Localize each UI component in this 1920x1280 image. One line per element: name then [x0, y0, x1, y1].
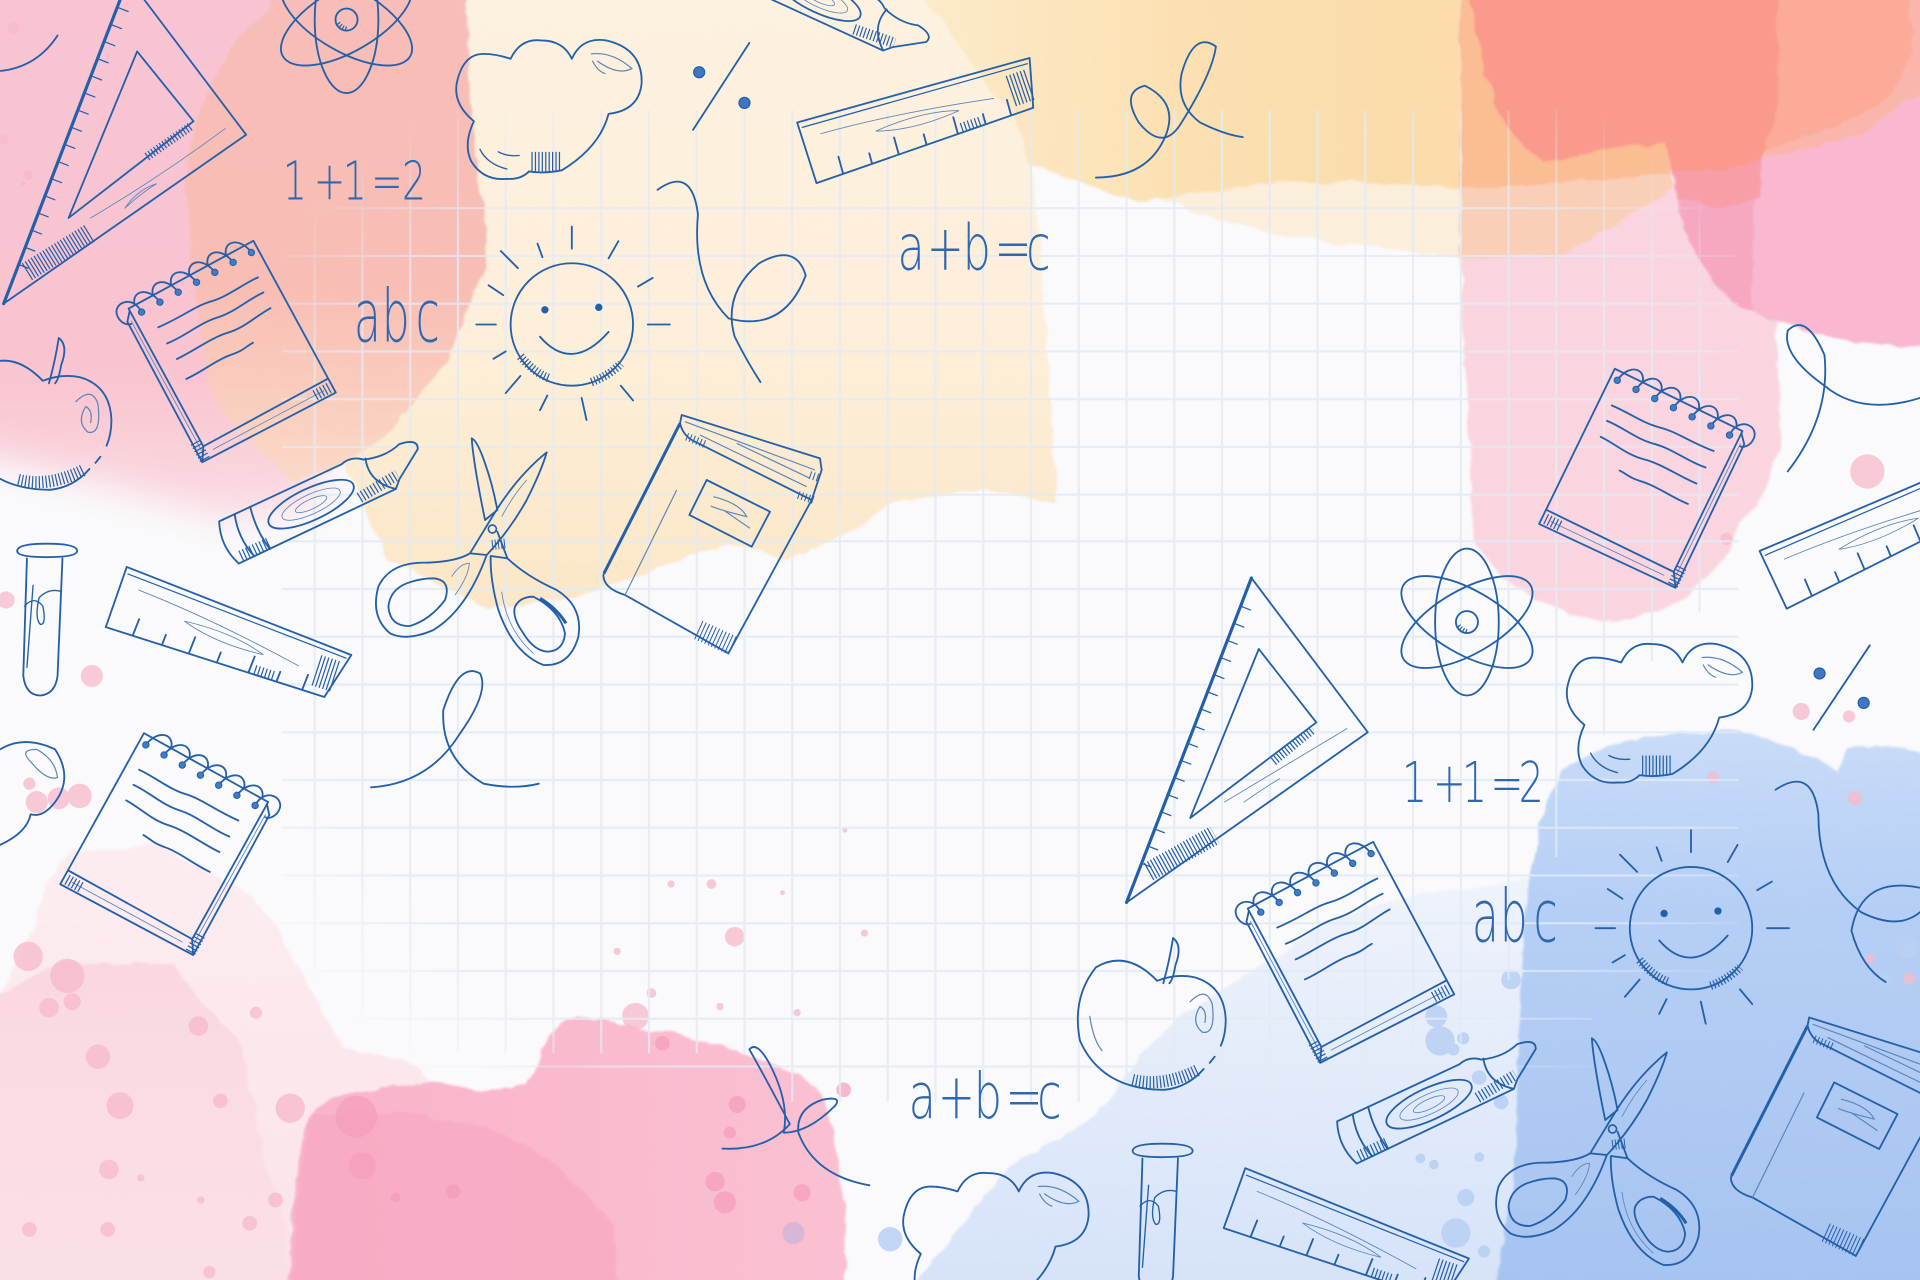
icon: cloud right: [1567, 644, 1752, 783]
icon: book top: [603, 415, 822, 653]
icon: atom top: [267, 0, 426, 93]
wash: darker pink bottom centre: [291, 1113, 620, 1280]
icon: set square top left: [4, 0, 246, 304]
icon: cloud bottom: [903, 1173, 1089, 1280]
squiggle centre top: [658, 182, 806, 382]
wash: pale blue bottom: [912, 876, 1543, 1280]
wash: yellow band top: [916, 0, 1460, 202]
squiggle top left corner: [0, 36, 58, 71]
percent symbol right: [1813, 645, 1870, 730]
icon: cloud top: [456, 40, 642, 179]
squiggle left: [371, 671, 539, 787]
icon: set square centre right: [1127, 578, 1368, 902]
icon: book bottom right: [1731, 1017, 1920, 1256]
icon: notebook right: [1539, 361, 1758, 592]
icon: atom right: [1387, 549, 1546, 696]
wash: pale pink inner bottom left: [0, 962, 287, 1280]
squiggle top: [1096, 42, 1243, 178]
wash: pale cream under yellow band: [1102, 159, 1460, 260]
equation: one plus one right: 1+1=2: [1402, 751, 1544, 816]
wash: pale pink right: [1460, 184, 1782, 622]
wash: salmon corner top right: [1763, 0, 1920, 196]
squiggle right upper: [1787, 325, 1920, 471]
equation: one plus one top: 1+1=2: [283, 150, 426, 212]
icon: crayon left: [214, 431, 431, 566]
icon: sun top: [476, 227, 670, 420]
wash: blue bottom right: [1496, 729, 1920, 1280]
icon: crayon bottom: [1332, 1031, 1549, 1166]
squiggle right lower: [1776, 782, 1920, 982]
icon: ruler left: [104, 567, 351, 714]
wash: salmon top right: [1763, 0, 1913, 149]
squiggle bottom: [722, 1047, 869, 1185]
label: abc right: abc: [1472, 875, 1558, 960]
wash: pink overlap: [1675, 184, 1753, 312]
wash: pale salmon arc: [1460, 153, 1673, 260]
icon: ruler top: [797, 58, 1047, 184]
icon: apple left: [0, 338, 111, 490]
equation: a plus b top: a+b=c: [898, 210, 1051, 284]
percent symbol top: [693, 43, 750, 130]
wash: coral overlap: [1673, 153, 1762, 206]
wash: pink top left: [0, 0, 318, 520]
icon: notebook top left: [113, 233, 336, 467]
wash: orange band: [1460, 0, 1678, 189]
icon: ruler right: [1760, 457, 1920, 610]
equation: a plus b bottom: a+b=c: [909, 1059, 1062, 1133]
icon: test tube left: [17, 544, 77, 696]
wash: salmon top left: [186, 0, 486, 480]
wash: cream top centre: [306, 0, 1056, 610]
icon: crayon top: [727, 0, 935, 67]
wash: red coral top: [1469, 0, 1779, 170]
icon: ruler bottom: [1221, 1168, 1469, 1280]
wash: pink top right: [1669, 86, 1920, 349]
icon: apple bottom: [1078, 938, 1226, 1090]
icon: test tube bottom: [1133, 1144, 1193, 1280]
icon: sun right: [1596, 830, 1789, 1024]
wash: pale pink outer bottom left: [0, 845, 431, 1280]
icon: partial apple left edge: [0, 742, 64, 845]
icon: notebook bottom: [1232, 834, 1454, 1067]
wash: pink bottom centre: [287, 1017, 846, 1280]
icon: scissors top: [376, 438, 579, 665]
notebook grid lines: [282, 110, 1739, 1102]
icon: scissors bottom: [1496, 1038, 1699, 1265]
icon: notebook left: [60, 726, 284, 960]
label: abc top: abc: [354, 275, 440, 360]
